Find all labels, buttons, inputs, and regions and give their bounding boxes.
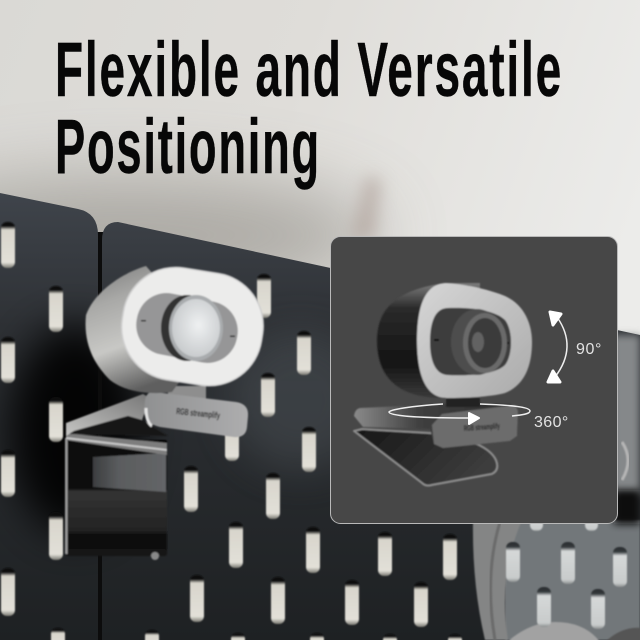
foot [354, 429, 497, 486]
camera body [377, 283, 480, 398]
title [55, 27, 563, 190]
label: 90 degrees: 90° [576, 341, 602, 358]
brand label: RGB streamplify [176, 406, 221, 421]
arrow: 360 degree rotation [389, 404, 530, 424]
neck [168, 386, 206, 400]
neck [446, 396, 480, 407]
clip bracket [65, 433, 167, 560]
pegboard [0, 193, 640, 640]
light ring [114, 260, 271, 393]
arrow: 90 degree tilt [548, 312, 567, 382]
inner recess [430, 308, 511, 375]
webcam on pegboard [65, 260, 271, 560]
stand plate [144, 392, 248, 437]
lens [161, 295, 223, 361]
background: headphones and blurred right side [473, 335, 640, 640]
front plate [432, 405, 518, 448]
light ring [417, 283, 532, 398]
panel: rotation inset [330, 236, 618, 524]
brand label: RGB streamplify [464, 421, 500, 433]
webcam in inset [354, 283, 532, 486]
label: 360 degrees: 360° [534, 414, 569, 431]
metal body [86, 266, 210, 393]
lens [451, 309, 507, 375]
arm [354, 404, 518, 448]
pegboard slots [1, 222, 462, 640]
indicator dots [141, 320, 235, 337]
stand arm [66, 394, 150, 436]
inner recess [131, 288, 243, 368]
title: Positioning [55, 104, 321, 190]
indicator dots [434, 339, 509, 344]
